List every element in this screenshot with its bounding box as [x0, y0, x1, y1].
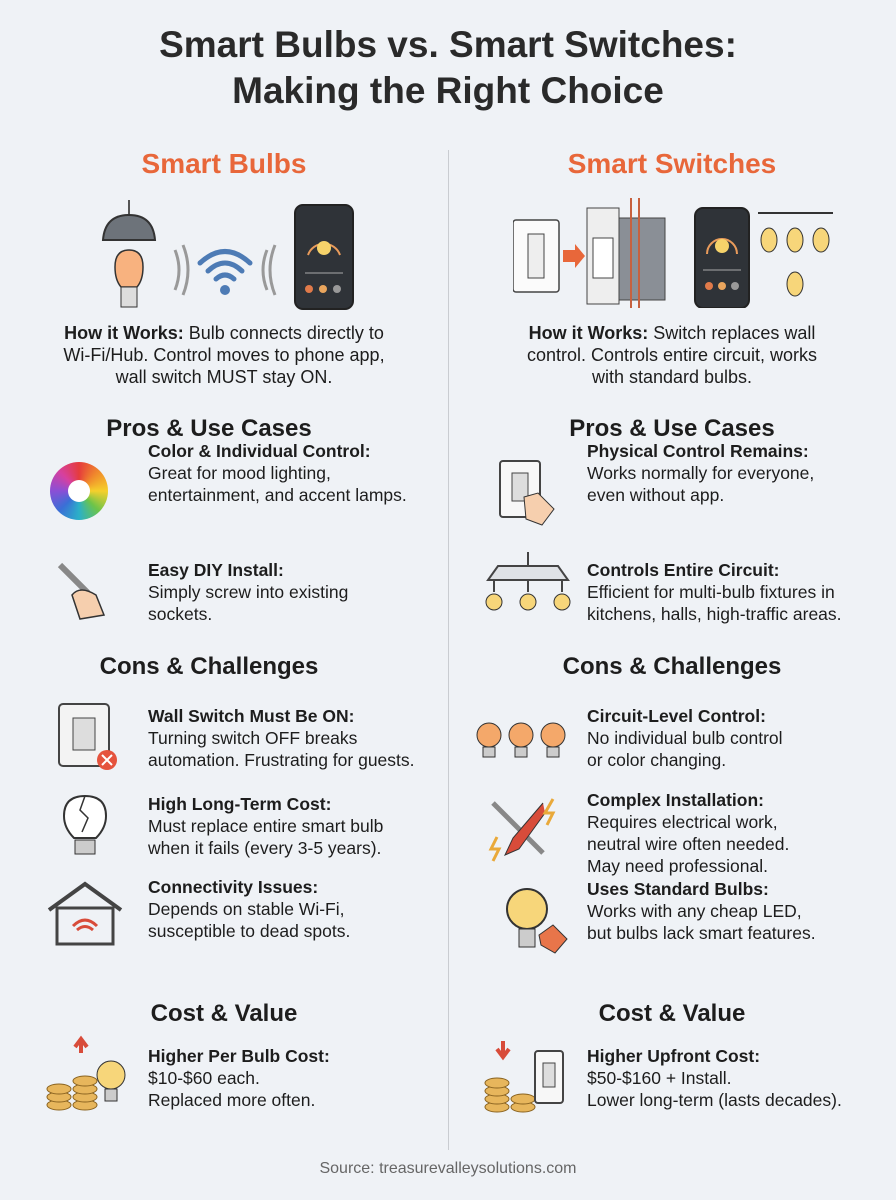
panel: smart switches [476, 148, 842, 1112]
text: how it works: Wi-Fi/Hub. Control moves to phone app, [63, 345, 385, 365]
title: Making the Right Choice [232, 70, 664, 111]
text: how it works: wall switch MUST stay ON. [116, 367, 332, 387]
text: complex install [587, 790, 789, 876]
icon: tools lightning [488, 798, 556, 862]
icon: broken bulb [63, 795, 107, 854]
text: connectivity: Depends on stable Wi-Fi, [148, 899, 344, 919]
text: wall switch: automation. Frustrating for guests. [148, 750, 415, 770]
text: high cost [148, 794, 383, 858]
text: circuit level: No individual bulb control [587, 728, 783, 748]
text: per bulb cost: $10-$60 each. [148, 1068, 260, 1088]
text: upfront cost: $50-$160 + Install. [587, 1068, 731, 1088]
text: standard bulbs: Uses Standard Bulbs: [587, 879, 769, 899]
text: upfront cost: Higher Upfront Cost: [587, 1046, 760, 1066]
icon: switch off [58, 703, 117, 770]
text: color control: entertainment, and accent lamps. [148, 485, 407, 505]
text: standard bulbs [587, 879, 816, 943]
text: upfront cost [587, 1046, 842, 1110]
text: color control [148, 441, 407, 505]
heading: cons: Cons & Challenges [100, 653, 318, 680]
text: wall switch [148, 706, 415, 770]
heading: cost: Cost & Value [151, 1000, 297, 1027]
text: physical control [587, 441, 814, 505]
text: physical control: even without app. [587, 485, 724, 505]
heading: pros: Pros & Use Cases [106, 415, 312, 442]
text: high cost: when it fails (every 3-5 years). [148, 838, 381, 858]
text: easy install: sockets. [148, 604, 212, 624]
text: how it works: control. Controls entire circuit, works [527, 345, 817, 365]
text: physical control: Physical Control Remains: [587, 441, 809, 461]
icon: chandelier [486, 552, 570, 610]
text: how it works: with standard bulbs. [592, 367, 752, 387]
text: how it works: How it Works: Switch replaces wall [529, 323, 815, 343]
heading: smart bulbs: Smart Bulbs [142, 148, 306, 179]
title [159, 24, 737, 111]
text: high cost: Must replace entire smart bulb [148, 816, 383, 836]
text: standard bulbs: Works with any cheap LED, [587, 901, 802, 921]
text: how it works [527, 323, 817, 387]
source: Source: treasurevalleysolutions.com [319, 1160, 576, 1177]
text: per bulb cost: Higher Per Bulb Cost: [148, 1046, 330, 1066]
title: Smart Bulbs vs. Smart Switches: [159, 24, 737, 65]
icon: screw hand [58, 563, 105, 620]
icon: color wheel [50, 462, 108, 520]
text: easy install: Simply screw into existing [148, 582, 348, 602]
text: wall switch: Turning switch OFF breaks [148, 728, 357, 748]
text: circuit level [587, 706, 783, 770]
text: complex install: neutral wire often needed. [587, 834, 789, 854]
text: easy install: Easy DIY Install: [148, 560, 284, 580]
text: color control: Great for mood lighting, [148, 463, 331, 483]
icon: house wifi [48, 882, 122, 946]
heading: smart switches: Smart Switches [568, 148, 776, 179]
text: how it works [63, 323, 385, 387]
panel: smart bulbs [46, 148, 415, 1110]
text: standard bulbs: but bulbs lack smart features. [587, 923, 816, 943]
icon: bulb tag [506, 888, 568, 954]
text: physical control: Works normally for everyone, [587, 463, 814, 483]
text: complex install: May need professional. [587, 856, 768, 876]
text: wall switch: Wall Switch Must Be ON: [148, 706, 354, 726]
text: color control: Color & Individual Control: [148, 441, 371, 461]
icon: coins up [46, 1036, 126, 1110]
icon: coins down switch [484, 1041, 564, 1112]
text: controls circuit: kitchens, halls, high-traffic areas. [587, 604, 842, 624]
heading: cost: Cost & Value [599, 1000, 745, 1027]
text: upfront cost: Lower long-term (lasts decades). [587, 1090, 842, 1110]
illustration: switch wiring phone [513, 198, 833, 308]
text: easy install [148, 560, 348, 624]
text: controls circuit [587, 560, 842, 624]
text: circuit level: Circuit-Level Control: [587, 706, 766, 726]
heading: pros: Pros & Use Cases [569, 415, 775, 442]
text: complex install: Complex Installation: [587, 790, 764, 810]
icon: three bulbs [476, 722, 566, 758]
illustration: bulb wifi phone [102, 200, 354, 310]
text: controls circuit: Controls Entire Circuit: [587, 560, 780, 580]
text: connectivity [148, 877, 350, 941]
text: high cost: High Long-Term Cost: [148, 794, 331, 814]
text: per bulb cost [148, 1046, 330, 1110]
text: how it works: How it Works: Bulb connects directly to [64, 323, 384, 343]
text: connectivity: susceptible to dead spots. [148, 921, 350, 941]
icon: hand switch [499, 460, 555, 526]
text: per bulb cost: Replaced more often. [148, 1090, 315, 1110]
heading: cons: Cons & Challenges [563, 653, 781, 680]
text: controls circuit: Efficient for multi-bulb fixtures in [587, 582, 835, 602]
text: complex install: Requires electrical work, [587, 812, 778, 832]
text: circuit level: or color changing. [587, 750, 726, 770]
text: connectivity: Connectivity Issues: [148, 877, 318, 897]
